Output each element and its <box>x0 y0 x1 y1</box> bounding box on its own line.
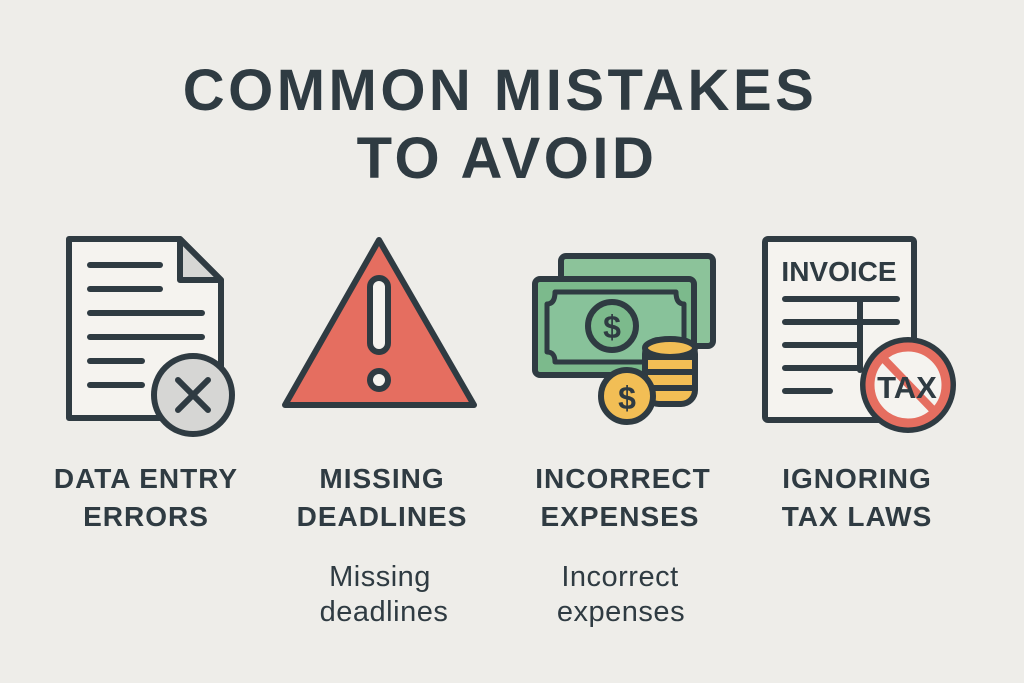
label: data entry errors <box>54 463 238 532</box>
label: data entry errors: DATA ENTRY <box>54 463 238 494</box>
title: COMMON MISTAKES <box>183 58 817 123</box>
label: incorrect expenses <box>535 463 711 628</box>
label: ignoring tax laws: TAX LAWS <box>782 501 932 532</box>
icon: money and coins: $ <box>603 309 621 345</box>
icon: warning triangle <box>285 240 474 405</box>
icon: invoice with no-tax sign: INVOICE <box>781 256 897 287</box>
label: missing deadlines: deadlines <box>320 596 448 628</box>
icon: document with error <box>69 239 232 434</box>
label: missing deadlines: DEADLINES <box>297 501 467 532</box>
label: incorrect expenses: EXPENSES <box>541 501 699 532</box>
icon: money and coins: $ <box>618 380 636 416</box>
icon: invoice with no-tax sign <box>765 239 953 430</box>
label: ignoring tax laws <box>782 463 932 532</box>
label: missing deadlines: MISSING <box>319 463 445 494</box>
title: TO AVOID <box>357 126 657 191</box>
label: incorrect expenses: INCORRECT <box>535 463 711 494</box>
label: incorrect expenses: Incorrect <box>561 561 679 593</box>
label: data entry errors: ERRORS <box>83 501 209 532</box>
label: missing deadlines: Missing <box>329 561 431 593</box>
label: missing deadlines <box>297 463 467 628</box>
label: ignoring tax laws: IGNORING <box>782 463 932 494</box>
icon: invoice with no-tax sign: TAX <box>877 370 937 405</box>
title <box>183 58 817 191</box>
icon: money and coins <box>535 256 713 422</box>
label: incorrect expenses: expenses <box>557 596 685 628</box>
